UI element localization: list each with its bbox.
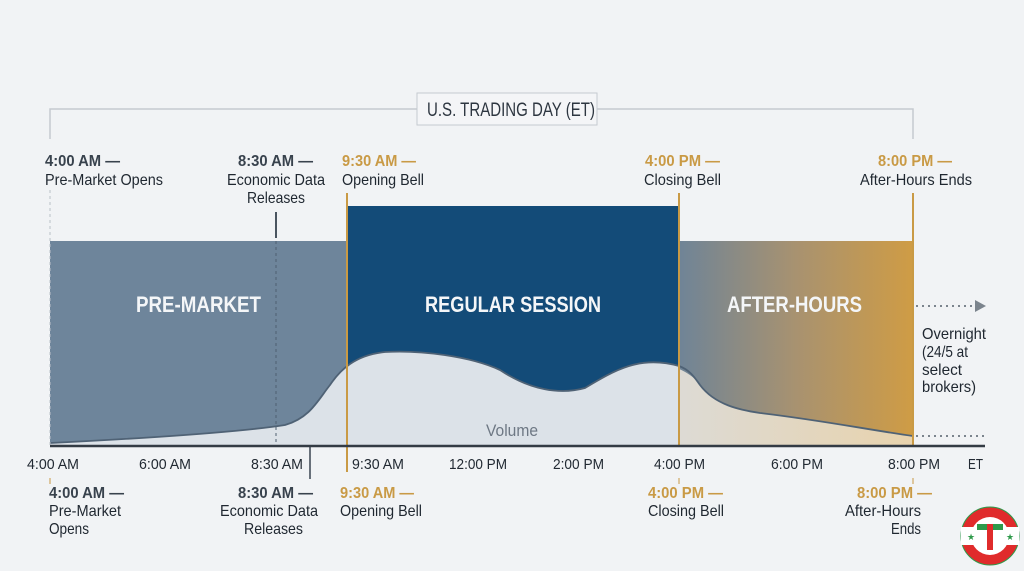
text: overnight: brokers) (922, 379, 976, 396)
top labels: 8:00 PM — (878, 153, 952, 170)
bottom labels: 9:30 AM — (340, 485, 414, 502)
x axis: 8:30 AM (251, 456, 303, 473)
top labels: After-Hours Ends (860, 172, 972, 189)
text: overnight: select (922, 362, 963, 379)
bottom labels: Closing Bell (648, 503, 724, 520)
chart: volume curve: Volume (486, 421, 538, 440)
top labels: Pre-Market Opens (45, 172, 163, 189)
panel: regular session: REGULAR SESSION (425, 292, 601, 317)
x axis: 6:00 PM (771, 456, 823, 473)
top labels: Opening Bell (342, 172, 424, 189)
x axis: ET (968, 456, 983, 473)
bottom labels: Opening Bell (340, 503, 422, 520)
chart: volume curve (50, 352, 913, 446)
title bracket (50, 93, 913, 139)
top labels: 4:00 PM — (645, 153, 720, 170)
panel: after-hours (679, 241, 913, 446)
bottom labels: 4:00 AM — (49, 485, 124, 502)
x axis (27, 446, 985, 484)
bottom labels: Ends (891, 521, 921, 538)
panel: pre-market: PRE-MARKET (136, 292, 261, 317)
text: overnight (922, 326, 987, 396)
bottom labels: Releases (244, 521, 303, 538)
icon: logo (961, 507, 1019, 565)
top labels: 9:30 AM — (342, 153, 416, 170)
bottom labels: Economic Data (220, 503, 318, 520)
icon: logo: ★ (1006, 532, 1014, 542)
dashed marker lines (50, 190, 913, 479)
bottom labels: Opens (49, 521, 89, 538)
icon: logo: ★ (967, 532, 975, 542)
panel: pre-market (50, 241, 347, 446)
text: overnight: Overnight (922, 326, 987, 343)
top labels: 8:30 AM — (238, 153, 313, 170)
panel: after-hours: AFTER-HOURS (727, 292, 862, 317)
bottom labels: After-Hours (845, 503, 921, 520)
x axis: 9:30 AM (352, 456, 404, 473)
bottom labels: 8:00 PM — (857, 485, 932, 502)
text: overnight: (24/5 at (922, 344, 968, 361)
arrow: overnight (916, 300, 986, 436)
title bracket: U.S. TRADING DAY (ET) (427, 100, 595, 121)
x axis: 2:00 PM (553, 456, 604, 473)
top labels (45, 153, 972, 207)
top labels: Releases (247, 190, 305, 207)
x axis: 12:00 PM (449, 456, 507, 473)
top labels: Closing Bell (644, 172, 721, 189)
top labels: Economic Data (227, 172, 325, 189)
bottom labels: 8:30 AM — (238, 485, 313, 502)
x axis: 6:00 AM (139, 456, 191, 473)
bottom labels (49, 485, 932, 538)
bottom labels: Pre-Market (49, 503, 122, 520)
top labels: 4:00 AM — (45, 153, 120, 170)
bottom labels: 4:00 PM — (648, 485, 723, 502)
x axis: 8:00 PM (888, 456, 940, 473)
x axis: 4:00 AM (27, 456, 79, 473)
x axis: 4:00 PM (654, 456, 705, 473)
panel: regular session (347, 206, 679, 446)
